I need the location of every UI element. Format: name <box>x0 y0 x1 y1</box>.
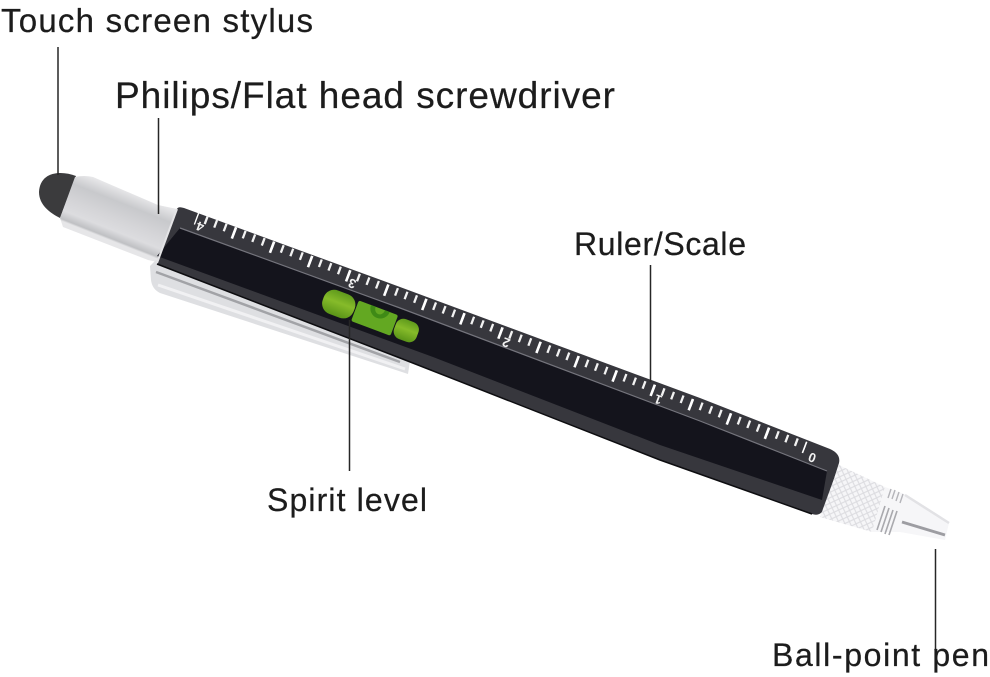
lower thread collar <box>877 506 897 535</box>
spirit level <box>319 287 422 346</box>
pen tip <box>872 487 949 540</box>
ruler boundary line <box>180 228 827 471</box>
knurled nose grip <box>820 465 885 532</box>
ruler numbers: 2 <box>500 334 512 351</box>
body left rim <box>157 209 177 263</box>
label: ruler: Ruler/Scale <box>574 226 746 262</box>
dark centre face <box>157 228 827 500</box>
pen illustration <box>39 173 949 540</box>
label: touch screen stylus: Touch screen stylus <box>1 2 313 39</box>
tip top edge <box>905 495 949 523</box>
ruler numbers: 0 <box>806 449 818 466</box>
black pen body <box>157 207 839 515</box>
ruler numbers: 1 <box>652 391 664 408</box>
silver barrel <box>60 176 177 262</box>
silver pocket clip <box>150 260 410 374</box>
ball-point refill <box>902 522 945 535</box>
ruler ticks <box>196 217 806 448</box>
stylus tip <box>39 173 76 218</box>
bottom edge shadow <box>157 264 812 514</box>
ruler numbers: 4 <box>193 218 206 235</box>
ruler numbers <box>193 218 818 466</box>
label: screwdriver: Philips/Flat head screwdriver <box>115 75 615 116</box>
label: spirit level: Spirit level <box>267 482 427 518</box>
ruler numbers: 3 <box>346 275 358 292</box>
upper thread collar <box>888 489 903 503</box>
label: ball-point pen: Ball-point pen <box>772 637 989 673</box>
